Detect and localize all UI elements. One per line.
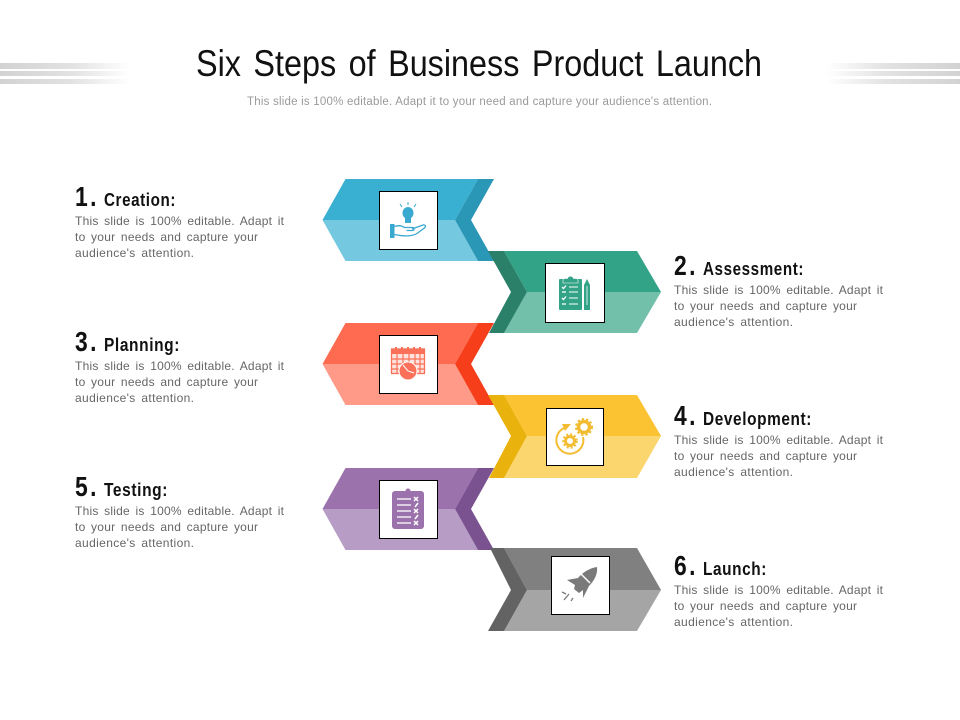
step 1 text: This slide is 100% editable. Adapt it	[75, 214, 285, 228]
icon box: gears	[546, 408, 604, 466]
step 2 text: audience's attention.	[674, 315, 793, 329]
step 6 arrow: gray	[488, 548, 661, 631]
step 3 text: This slide is 100% editable. Adapt it	[75, 359, 285, 373]
step 1 text: Creation:	[104, 190, 176, 210]
step 3 text: audience's attention.	[75, 391, 194, 405]
step 2 arrow: green	[488, 251, 661, 333]
title: Six Steps of Business Product Launch	[196, 43, 762, 84]
icon box: checklist	[380, 480, 438, 538]
step 5 text: 5.	[75, 471, 99, 502]
step 1 text: to your needs and capture your	[75, 230, 258, 244]
icon box: clipboard and pencil	[546, 264, 604, 322]
step 6 text: Launch:	[703, 559, 767, 579]
step 3 text: 3.	[75, 326, 99, 357]
step 4 text	[674, 400, 884, 479]
step 3 arrow: red	[322, 323, 494, 405]
step 2 text: 2.	[674, 250, 698, 281]
step 2 text	[674, 250, 884, 329]
step 5 arrow: purple	[322, 468, 494, 550]
step 4 text: This slide is 100% editable. Adapt it	[674, 433, 884, 447]
step 3 text: Planning:	[104, 335, 180, 355]
step 4 text: Development:	[703, 409, 812, 429]
subtitle: This slide is 100% editable. Adapt it to your need and capture your audience's attention.	[247, 96, 712, 108]
step 3 text: to your needs and capture your	[75, 375, 258, 389]
step 2 text: This slide is 100% editable. Adapt it	[674, 283, 884, 297]
step 1 text: audience's attention.	[75, 246, 194, 260]
step 6 text: audience's attention.	[674, 615, 793, 629]
icon box: calendar and clock	[380, 336, 438, 394]
step 5 text: audience's attention.	[75, 536, 194, 550]
step 1 text: 1.	[75, 181, 99, 212]
step 4 text: 4.	[674, 400, 698, 431]
step 4 text: to your needs and capture your	[674, 449, 857, 463]
icon box: rocket	[552, 556, 610, 614]
step 4 text: audience's attention.	[674, 465, 793, 479]
left header decoration	[0, 63, 130, 84]
step 5 text: Testing:	[104, 480, 168, 500]
icon box: lightbulb in hand	[380, 192, 438, 250]
step 2 text: Assessment:	[703, 259, 804, 279]
step 5 text: to your needs and capture your	[75, 520, 258, 534]
step 1 arrow: blue	[322, 179, 494, 261]
step 5 text	[75, 471, 285, 550]
step 3 text	[75, 326, 285, 405]
step 6 text: to your needs and capture your	[674, 599, 857, 613]
step 1 text	[75, 181, 285, 260]
right header decoration	[826, 63, 960, 84]
step 6 text	[674, 550, 884, 629]
step 6 text: 6.	[674, 550, 698, 581]
step 4 arrow: yellow	[488, 395, 661, 478]
step 6 text: This slide is 100% editable. Adapt it	[674, 583, 884, 597]
step 2 text: to your needs and capture your	[674, 299, 857, 313]
step 5 text: This slide is 100% editable. Adapt it	[75, 504, 285, 518]
